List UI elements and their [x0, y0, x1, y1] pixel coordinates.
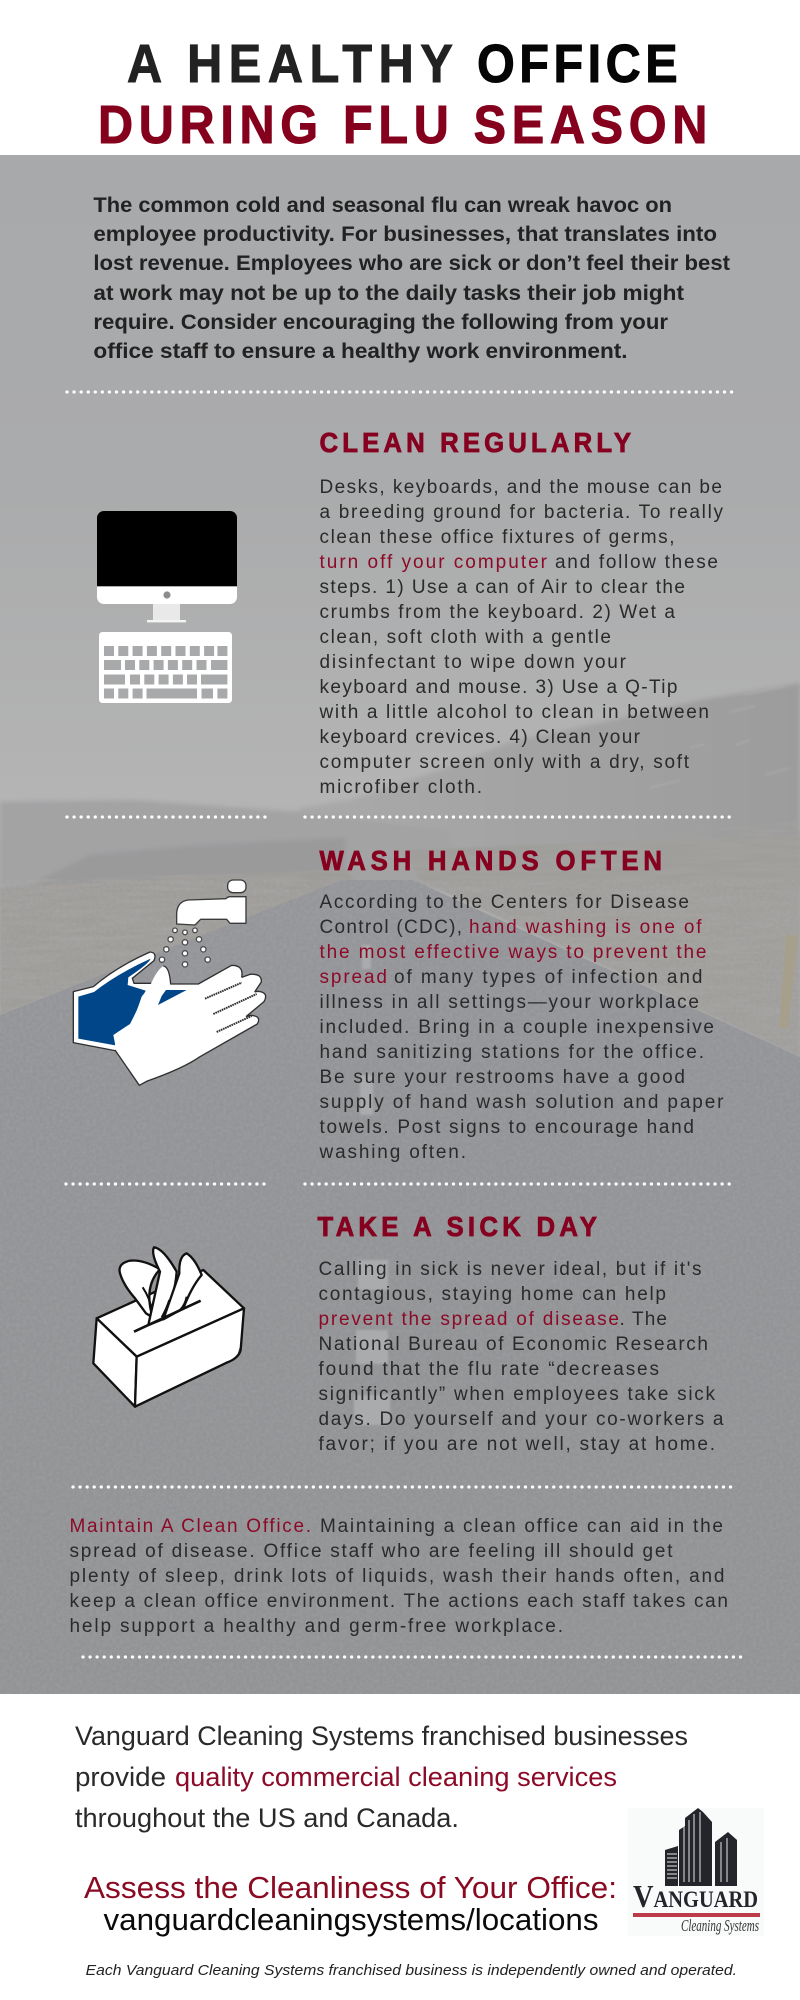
text: take a sick day: favor; if you are not well, stay at home.	[318, 1434, 715, 1455]
text: clean regularly: computer screen only with a dry, soft	[320, 752, 690, 773]
text: clean regularly: steps. 1) Use a can of Air to clear the	[320, 577, 685, 598]
intro paragraph	[93, 193, 730, 363]
heading: clean regularly: CLEAN REGULARLY	[320, 427, 631, 458]
text: wash hands often: spread	[320, 967, 387, 988]
text: wash hands often: Be sure your restrooms have a good	[320, 1067, 685, 1088]
text: maintain a clean office: Maintain A Clean Office.	[70, 1516, 311, 1537]
text: clean regularly: keyboard crevices. 4) Clean your	[320, 727, 641, 748]
intro paragraph: The common cold and seasonal flu can wreak havoc on	[93, 193, 672, 217]
intro paragraph: lost revenue. Employees who are sick or don’t feel their best	[93, 251, 730, 275]
text: wash hands often: hand washing is one of	[469, 917, 702, 938]
text: take a sick day: . The	[620, 1309, 667, 1330]
text: clean regularly: and follow these	[555, 552, 718, 573]
text: take a sick day: prevent the spread of disease	[318, 1309, 619, 1330]
text: clean regularly: disinfectant to wipe down your	[320, 652, 627, 673]
text: wash hands often: Control (CDC),	[320, 917, 462, 938]
text: franchise statement	[75, 1721, 688, 1833]
text: wash hands often: of many types of infection and	[394, 967, 702, 988]
text: clean regularly: turn off your computer	[320, 552, 548, 573]
text: wash hands often: the most effective ways to prevent the	[320, 942, 706, 963]
text: wash hands often: hand sanitizing stations for the office.	[320, 1042, 704, 1063]
text: take a sick day: Calling in sick is never ideal, but if it's	[318, 1259, 702, 1280]
disclaimer: Each Vanguard Cleaning Systems franchised business is independently owned and operated.	[86, 1962, 737, 1979]
title	[98, 33, 707, 155]
text: wash hands often: illness in all settings—your workplace	[320, 992, 699, 1013]
text: franchise statement: quality commercial cleaning services	[175, 1762, 617, 1792]
heading: take a sick day: TAKE A SICK DAY	[318, 1211, 597, 1242]
icon: computer monitor and keyboard	[97, 511, 237, 703]
text: take a sick day: significantly” when employees take sick	[318, 1384, 716, 1405]
heading: wash hands often: WASH HANDS OFTEN	[320, 845, 662, 876]
panel: road photo background	[0, 155, 800, 1694]
text: clean regularly: crumbs from the keyboard. 2) Wet a	[320, 602, 675, 623]
text: clean regularly	[318, 477, 724, 798]
text: wash hands often: washing often.	[318, 1142, 466, 1163]
text: clean regularly: Desks, keyboards, and the mouse can be	[320, 477, 722, 498]
text: maintain a clean office: plenty of sleep, drink lots of liquids, wash their hands often, and	[70, 1566, 724, 1587]
text: franchise statement: Vanguard Cleaning Systems franchised businesses	[75, 1721, 688, 1751]
text: maintain a clean office	[70, 1516, 728, 1637]
title: DURING FLU SEASON	[98, 94, 707, 155]
text: maintain a clean office: Maintaining a clean office can aid in the	[320, 1516, 723, 1537]
text: wash hands often: supply of hand wash solution and paper	[320, 1092, 724, 1113]
intro paragraph: office staff to ensure a healthy work environment.	[93, 339, 628, 363]
title: A HEALTHY	[127, 33, 453, 94]
text: maintain a clean office: help support a healthy and germ-free workplace.	[70, 1616, 563, 1637]
text: take a sick day: National Bureau of Economic Research	[318, 1334, 708, 1355]
intro paragraph: employee productivity. For businesses, that translates into	[93, 222, 717, 246]
text: take a sick day: days. Do yourself and your co-workers a	[318, 1409, 724, 1430]
text: wash hands often: According to the Centers for Disease	[320, 892, 689, 913]
text: clean regularly: clean these office fixtures of germs,	[320, 527, 674, 548]
text: take a sick day: contagious, staying home can help	[318, 1284, 666, 1305]
text: franchise statement: provide	[75, 1762, 166, 1792]
logo: Vanguard Cleaning Systems: Cleaning Systems	[681, 1916, 759, 1935]
intro paragraph: require. Consider encouraging the following from your	[93, 310, 669, 334]
text: wash hands often	[318, 892, 724, 1163]
text: clean regularly: keyboard and mouse. 3) Use a Q-Tip	[320, 677, 678, 698]
text: take a sick day: found that the flu rate “decreases	[318, 1359, 659, 1380]
text: wash hands often: included. Bring in a couple inexpensive	[320, 1017, 714, 1038]
text: maintain a clean office: spread of disease. Office staff who are feeling ill should get	[70, 1541, 673, 1562]
call to action: Assess the Cleanliness of Your Office:	[84, 1870, 617, 1905]
icon: hands washing under faucet	[73, 880, 266, 1085]
text: wash hands often: towels. Post signs to encourage hand	[320, 1117, 694, 1138]
title: OFFICE	[477, 33, 678, 94]
logo: Vanguard Cleaning Systems: VANGUARD	[633, 1878, 758, 1914]
text: franchise statement: throughout the US and Canada.	[75, 1803, 459, 1833]
logo: Vanguard Cleaning Systems	[628, 1808, 764, 1936]
text: clean regularly: a breeding ground for bacteria. To really	[320, 502, 724, 523]
text: take a sick day	[318, 1259, 724, 1455]
icon: tissue box	[93, 1247, 244, 1407]
call to action	[84, 1870, 617, 1937]
text: maintain a clean office: keep a clean office environment. The actions each staff takes can	[70, 1591, 728, 1612]
call to action: vanguardcleaningsystems/locations	[104, 1902, 598, 1937]
intro paragraph: at work may not be up to the daily tasks their job might	[93, 281, 684, 305]
text: clean regularly: microfiber cloth.	[320, 777, 482, 798]
text: clean regularly: clean, soft cloth with a gentle	[320, 627, 611, 648]
text: clean regularly: with a little alcohol to clean in between	[318, 702, 709, 723]
